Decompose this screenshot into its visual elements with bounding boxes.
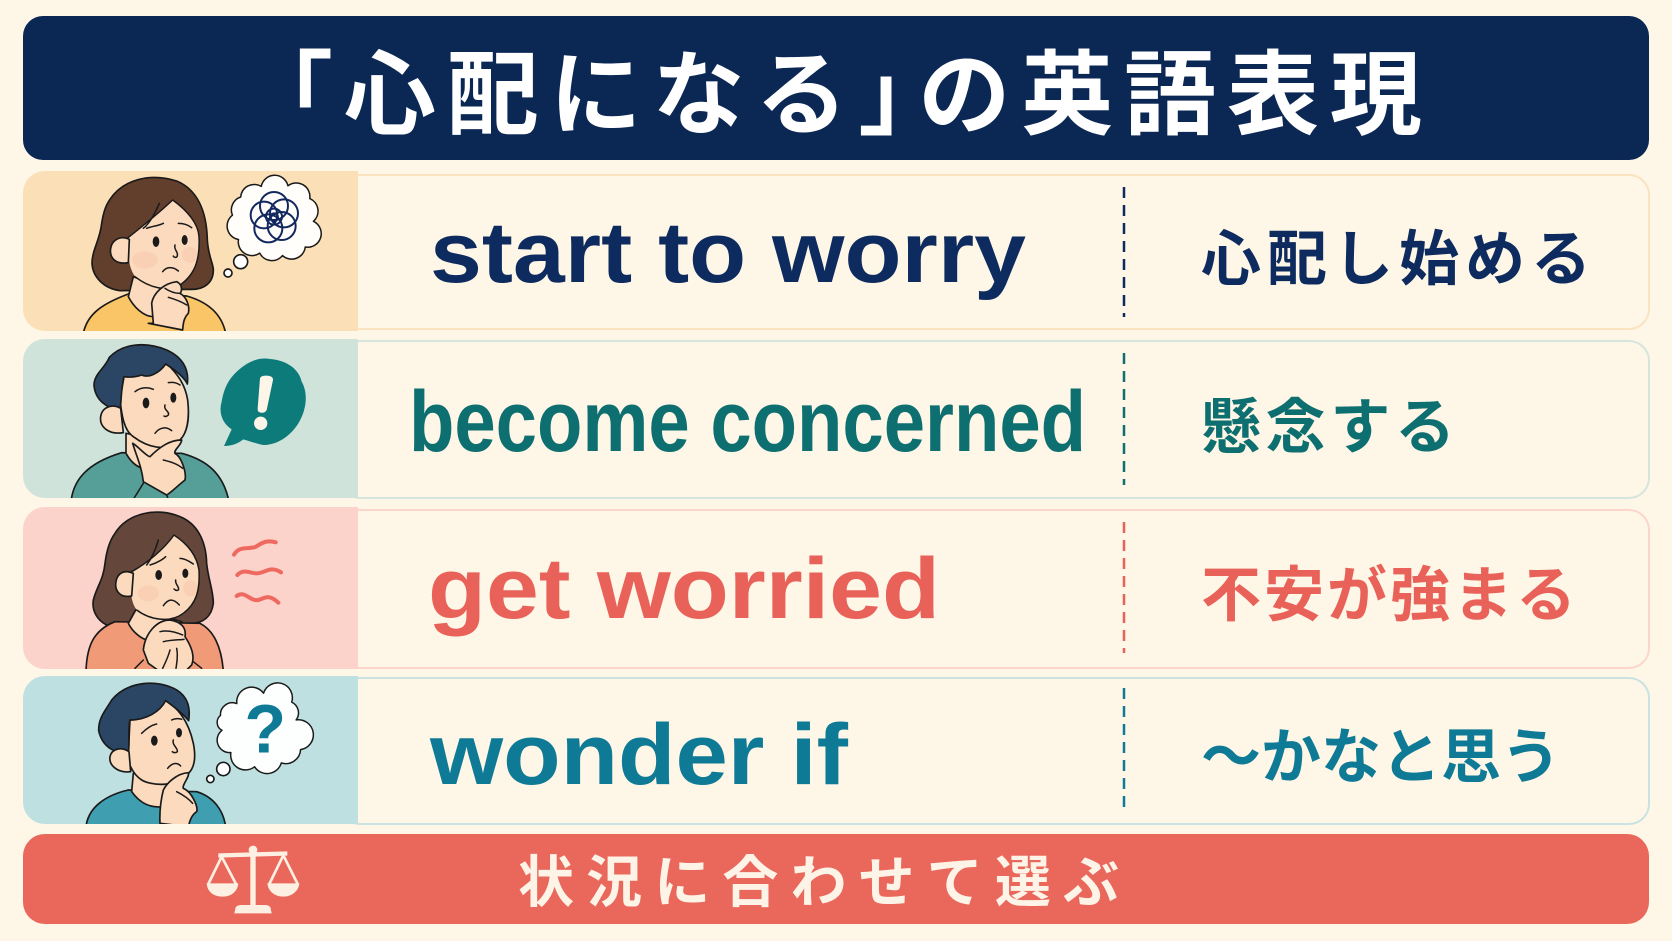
bottom banner bbox=[23, 834, 1649, 924]
row 2 illustration panel bbox=[23, 339, 358, 502]
title text: 「心配になる」の英語表現 bbox=[241, 45, 1433, 147]
title banner bbox=[23, 16, 1649, 160]
anxious woman with clasped hands bbox=[86, 512, 281, 672]
row 4 english phrase: wonder if bbox=[429, 707, 848, 803]
row 2 card bbox=[340, 341, 1649, 498]
icon: question mark: ? bbox=[244, 692, 286, 768]
row 2 japanese meaning: 懸念する bbox=[1201, 394, 1455, 461]
row 1 japanese meaning: 心配し始める bbox=[1201, 226, 1591, 293]
man with question thought bbox=[86, 683, 313, 827]
row 1: start to worry bbox=[23, 171, 1649, 333]
row 1 illustration panel bbox=[23, 171, 358, 333]
icon: tangled thoughts bbox=[251, 192, 298, 242]
banner text: 状況に合わせて選ぶ bbox=[518, 851, 1119, 914]
row 3 japanese meaning: 不安が強まる bbox=[1201, 562, 1576, 629]
row 1 card bbox=[340, 175, 1649, 329]
row 3: get worried bbox=[23, 507, 1649, 672]
row 4: wonder if bbox=[23, 676, 1649, 827]
icon: anxiety waves bbox=[234, 541, 281, 603]
row 4 japanese meaning: ～かなと思う bbox=[1201, 724, 1561, 791]
icon: balance scale bbox=[207, 846, 299, 913]
row 3 illustration panel bbox=[23, 507, 358, 672]
row 4 card bbox=[340, 678, 1649, 824]
woman with tangled thought bbox=[83, 175, 321, 333]
row 2: become concerned bbox=[23, 339, 1649, 502]
row 4 illustration panel bbox=[23, 676, 358, 827]
row 3 card bbox=[340, 510, 1649, 668]
man with exclamation bubble bbox=[71, 345, 306, 502]
row 2 english phrase: become concerned bbox=[409, 374, 1086, 470]
row 1 english phrase: start to worry bbox=[430, 205, 1026, 301]
icon: exclamation bubble bbox=[221, 359, 306, 446]
row 3 english phrase: get worried bbox=[428, 541, 940, 637]
